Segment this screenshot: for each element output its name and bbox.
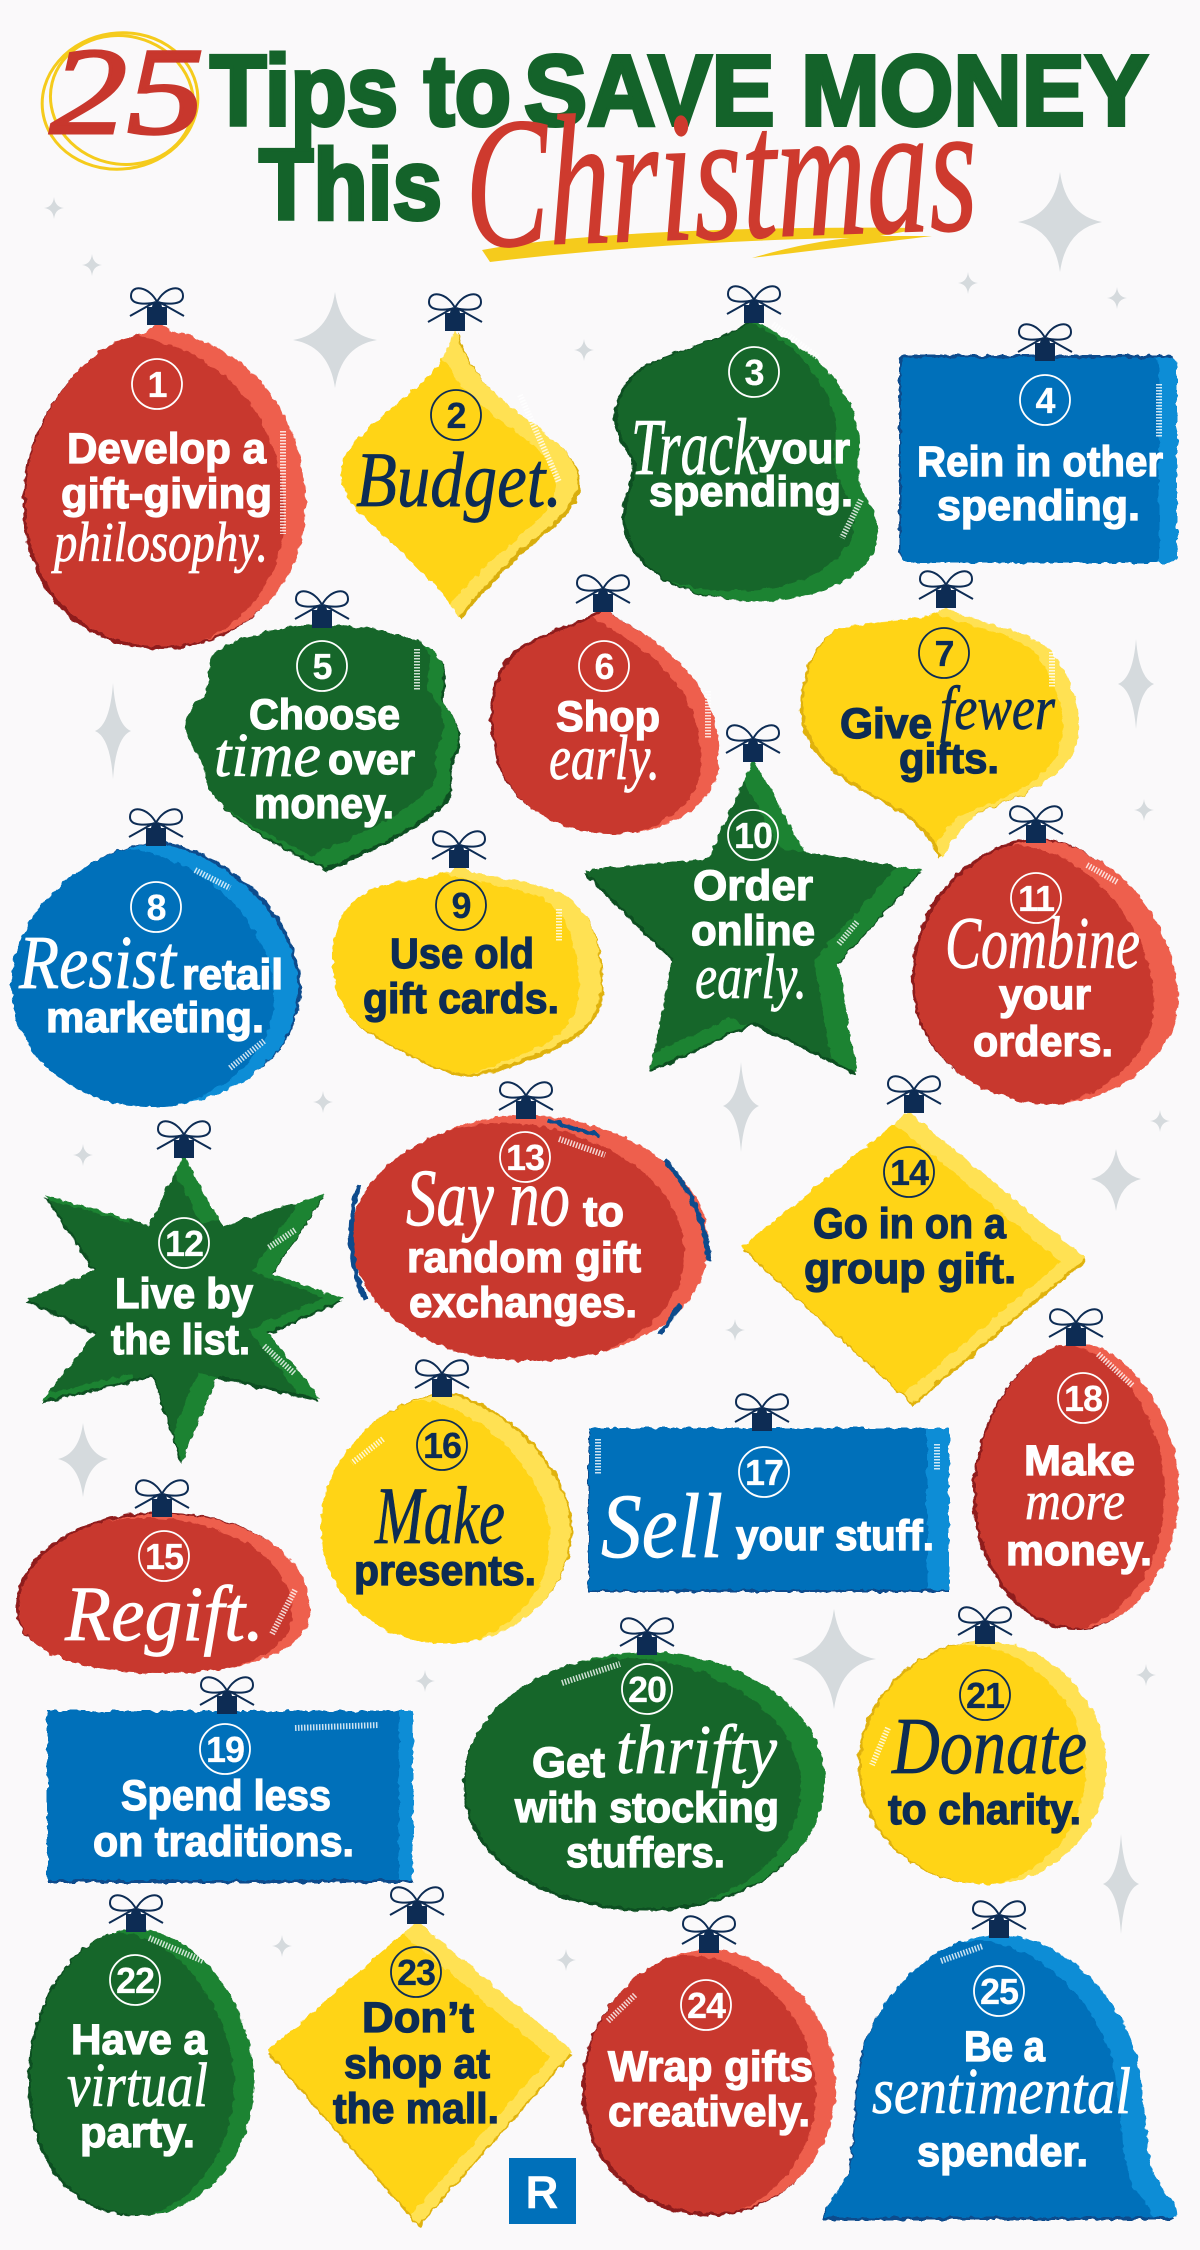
ornament 18: red tall oval — [962, 1309, 1179, 1630]
number 9: 9 — [451, 885, 471, 926]
ornament 21: yellow round — [841, 1607, 1106, 1888]
tip text: spender. — [917, 2128, 1088, 2176]
ornament body — [311, 865, 603, 1078]
tip text: random gift — [407, 1234, 641, 1282]
ornament body — [718, 1112, 1086, 1407]
tip text: money. — [254, 780, 394, 828]
tip text: your stuff. — [736, 1512, 934, 1560]
tip text: retail — [182, 951, 283, 999]
tip text: the list. — [111, 1316, 250, 1364]
number 17 — [739, 1447, 789, 1497]
tip text: over — [328, 736, 415, 784]
number 18 — [1058, 1373, 1108, 1423]
icon: bow and cap — [390, 1887, 444, 1924]
number 24 — [681, 1980, 731, 2030]
number 6: 6 — [594, 646, 614, 687]
number 6 — [579, 641, 629, 691]
tip text: Regift. — [64, 1570, 264, 1657]
number 24: 24 — [687, 1985, 726, 2026]
number 1: 1 — [147, 364, 167, 405]
ornament 6: red teardrop — [475, 575, 719, 838]
ornament 9: yellow squircle — [311, 831, 603, 1078]
heading line 2: This — [259, 129, 442, 241]
ornament 20: green wide round — [441, 1618, 825, 1914]
icon: bow and cap — [200, 1677, 254, 1714]
tip text: Make — [374, 1470, 505, 1561]
icon: bow and cap — [499, 1082, 553, 1119]
ornament body — [612, 323, 878, 602]
tip text: your — [758, 425, 850, 473]
number 12: 12 — [165, 1223, 203, 1264]
number 16 — [417, 1420, 467, 1470]
icon: bow and cap — [1018, 324, 1072, 361]
number 21: 21 — [966, 1675, 1005, 1716]
tip text — [945, 903, 1140, 1066]
number 12 — [159, 1218, 209, 1268]
tip text: Have a — [71, 2016, 208, 2064]
number 25 — [974, 1966, 1024, 2016]
number 16: 16 — [423, 1425, 461, 1466]
tip text — [631, 404, 853, 516]
tip text — [333, 1994, 499, 2133]
tip text: time — [214, 722, 321, 790]
number 23: 23 — [397, 1952, 435, 1993]
ornament body — [7, 1153, 344, 1464]
tip text: to charity. — [888, 1786, 1081, 1834]
tip text — [111, 1270, 253, 1364]
tip text — [406, 1152, 641, 1327]
ornament body — [301, 1392, 572, 1649]
number 17: 17 — [745, 1452, 783, 1493]
logo: Ramsey R — [509, 2158, 576, 2224]
tip text: Choose — [249, 691, 400, 739]
tip text — [354, 1470, 536, 1595]
tip text — [804, 1200, 1016, 1293]
badge: yellow scribble circle — [33, 20, 207, 180]
tip text: Wrap gifts — [608, 2043, 813, 2091]
icon: bow and cap — [958, 1607, 1012, 1644]
ornament body — [788, 607, 1079, 860]
tip text — [872, 2023, 1131, 2176]
number 11: 11 — [1018, 878, 1055, 919]
tip text: creatively. — [608, 2088, 810, 2136]
number 14 — [884, 1147, 934, 1197]
number 4 — [1020, 375, 1070, 425]
tip text — [67, 2016, 208, 2157]
ornament 3: green blob — [594, 286, 878, 601]
sparkles background — [44, 172, 1170, 1971]
number 21 — [960, 1670, 1010, 1720]
tip text — [601, 1475, 934, 1577]
tip text: party. — [80, 2109, 195, 2157]
tip text — [93, 1772, 354, 1866]
tip text: early. — [695, 941, 807, 1012]
number 20: 20 — [628, 1669, 666, 1710]
tip text — [917, 438, 1163, 530]
tip text: fewer — [940, 675, 1056, 743]
tip text: on traditions. — [93, 1818, 354, 1866]
number 8: 8 — [146, 887, 166, 928]
tip text: shop at — [344, 2040, 490, 2088]
ornament 4: blue rectangle — [883, 324, 1177, 563]
ornament 16: yellow round — [301, 1360, 572, 1649]
number 11 — [1011, 873, 1061, 923]
ornament 7: yellow onion — [788, 571, 1079, 860]
ornament 23: yellow diamond — [246, 1887, 572, 2230]
tip text: Use old — [390, 930, 534, 978]
ornament body — [441, 1652, 825, 1914]
icon: bow and cap — [295, 591, 349, 628]
number 13 — [500, 1132, 550, 1182]
title — [33, 20, 1148, 288]
ornament body — [0, 841, 301, 1113]
icon: bow and cap — [129, 809, 183, 846]
icon: bow and cap — [135, 1480, 189, 1517]
ornament body — [33, 1711, 413, 1883]
icon: bow and cap — [432, 831, 486, 868]
tip text: Live by — [115, 1270, 253, 1318]
tip text: presents. — [354, 1547, 536, 1595]
number 5: 5 — [312, 646, 332, 687]
ornament body — [565, 1950, 836, 2219]
ornament 19: blue rectangle — [33, 1677, 413, 1883]
number 23 — [391, 1947, 441, 1997]
heading line 1: Tips to — [210, 35, 511, 147]
number 3 — [729, 347, 779, 397]
icon: bow and cap — [415, 1360, 469, 1397]
ornament body — [567, 1428, 949, 1592]
tip text: sentimental — [872, 2055, 1131, 2128]
tip text: Say no — [406, 1152, 570, 1243]
tip text: virtual — [67, 2052, 208, 2120]
tip text: gift cards. — [363, 975, 559, 1023]
tip text: stuffers. — [566, 1829, 725, 1877]
ornament body — [319, 330, 581, 621]
ornament body — [883, 355, 1177, 563]
number 15: 15 — [145, 1536, 184, 1577]
number 7 — [919, 628, 969, 678]
icon: bow and cap — [972, 1901, 1026, 1938]
number 3: 3 — [744, 352, 764, 393]
number 10 — [728, 810, 778, 860]
tip text: Spend less — [121, 1772, 331, 1820]
ornament 1: red round — [4, 288, 306, 654]
number 2 — [431, 390, 481, 440]
tip text: Resist — [18, 921, 178, 1005]
brush underline — [482, 228, 932, 262]
number 14: 14 — [890, 1152, 929, 1193]
ornament 17: blue rectangle — [567, 1394, 949, 1592]
tip text: Be a — [964, 2023, 1046, 2071]
tip text: Track — [631, 404, 759, 492]
tip text: orders. — [973, 1018, 1113, 1066]
number 22 — [110, 1955, 160, 2005]
icon: bow and cap — [1009, 806, 1063, 843]
icon: bow and cap — [735, 1394, 789, 1431]
ornament 12: green eight-point star — [7, 1121, 344, 1464]
tip text: group gift. — [804, 1245, 1016, 1293]
tip text: Make — [1024, 1437, 1135, 1485]
ornament 25: blue bell — [802, 1901, 1177, 2223]
ornament 8: blue round — [0, 809, 301, 1113]
ornament body — [891, 838, 1178, 1109]
tip text — [214, 691, 415, 828]
ornament body — [11, 1929, 254, 2219]
icon: bow and cap — [109, 1895, 163, 1932]
tip text: gift-giving — [61, 470, 272, 518]
heading line 1 — [210, 35, 1148, 147]
tip text: Budget. — [356, 436, 562, 523]
ornament 5: green bumpy — [171, 591, 460, 871]
ornament body — [841, 1641, 1106, 1888]
number 25: 25 — [980, 1971, 1019, 2012]
ornament 22: green tall oval — [11, 1895, 254, 2219]
tip text: Rein in other — [917, 438, 1163, 486]
number 9 — [436, 880, 486, 930]
ornament body — [4, 322, 306, 654]
icon: bow and cap — [428, 294, 482, 331]
tip text: early. — [549, 722, 660, 793]
ornament body — [1, 1512, 310, 1677]
tip text: exchanges. — [409, 1279, 637, 1327]
tip text: marketing. — [46, 994, 264, 1042]
number 4: 4 — [1035, 380, 1055, 421]
icon: bow and cap — [620, 1618, 674, 1655]
ornament 2: yellow finial — [319, 294, 581, 621]
tip text: Develop a — [67, 425, 267, 473]
number 1 — [132, 359, 182, 409]
ornament body — [475, 607, 719, 838]
ornament 13: red ellipse — [328, 1082, 709, 1369]
tip text: Don’t — [362, 1994, 474, 2042]
tip text: money. — [1006, 1527, 1152, 1575]
tip text: the mall. — [333, 2085, 499, 2133]
tip text: gifts. — [899, 735, 999, 783]
tip text: more — [1025, 1471, 1125, 1531]
number 19 — [200, 1724, 250, 1774]
number 22: 22 — [116, 1960, 154, 2001]
ornament body — [246, 1921, 572, 2230]
tip text — [608, 2043, 813, 2136]
tip text: spending. — [937, 482, 1140, 530]
icon: bow and cap — [157, 1121, 211, 1158]
number 10: 10 — [734, 815, 772, 856]
tip text: Donate — [891, 1703, 1087, 1791]
ornament 15: red wide oval — [1, 1480, 310, 1677]
icon: bow and cap — [887, 1076, 941, 1113]
tip text: Get — [532, 1739, 605, 1787]
tip text — [691, 862, 815, 1012]
logo: Ramsey R: R — [525, 2166, 559, 2218]
ornament body — [561, 755, 922, 1075]
icon: bow and cap — [130, 288, 184, 325]
tip text — [18, 921, 283, 1042]
icon: bow and cap — [576, 575, 630, 612]
number 19: 19 — [206, 1729, 244, 1770]
tip text — [51, 425, 272, 574]
ornament body — [328, 1115, 709, 1369]
tip text — [549, 693, 660, 793]
number 2: 2 — [446, 395, 466, 436]
number 15 — [139, 1531, 189, 1581]
ornament body — [171, 613, 460, 871]
icon: bow and cap — [1049, 1309, 1103, 1346]
tip text: with stocking — [514, 1784, 779, 1832]
number 7: 7 — [934, 633, 954, 674]
tip text: Shop — [556, 693, 660, 741]
icon: bow and cap — [727, 286, 781, 323]
number 13: 13 — [506, 1137, 544, 1178]
icon: bow and cap — [726, 725, 780, 762]
number 5 — [297, 641, 347, 691]
tip text — [888, 1703, 1087, 1834]
tip text: to — [583, 1188, 624, 1236]
tip text: Give — [840, 700, 932, 748]
heading line 1: SAVE MONEY — [524, 35, 1148, 147]
icon: bow and cap — [919, 571, 973, 608]
tip text — [363, 930, 559, 1023]
ornament body — [962, 1343, 1179, 1630]
tip text: Order — [693, 862, 813, 910]
tip text: thrifty — [616, 1712, 778, 1789]
ornament 24: red round — [565, 1916, 836, 2219]
tip text: Sell — [601, 1475, 723, 1577]
number 18: 18 — [1064, 1378, 1102, 1419]
ornament body — [802, 1935, 1177, 2223]
ornament 10: green star — [561, 725, 922, 1075]
tip text: online — [691, 907, 815, 955]
number 20 — [622, 1664, 672, 1714]
tip text: Go in on a — [813, 1200, 1007, 1248]
ornament 14: yellow diamond — [718, 1076, 1086, 1407]
tip text — [514, 1712, 779, 1877]
tip text — [1006, 1437, 1152, 1575]
tip text — [840, 675, 1056, 783]
badge number 25: 25 — [50, 23, 204, 160]
tip text: philosophy. — [51, 512, 268, 574]
icon: bow and cap — [682, 1916, 736, 1953]
tip text: spending. — [649, 468, 853, 516]
number 8 — [131, 882, 181, 932]
tip text: your — [999, 971, 1091, 1019]
ornament 11: red round — [891, 806, 1178, 1109]
